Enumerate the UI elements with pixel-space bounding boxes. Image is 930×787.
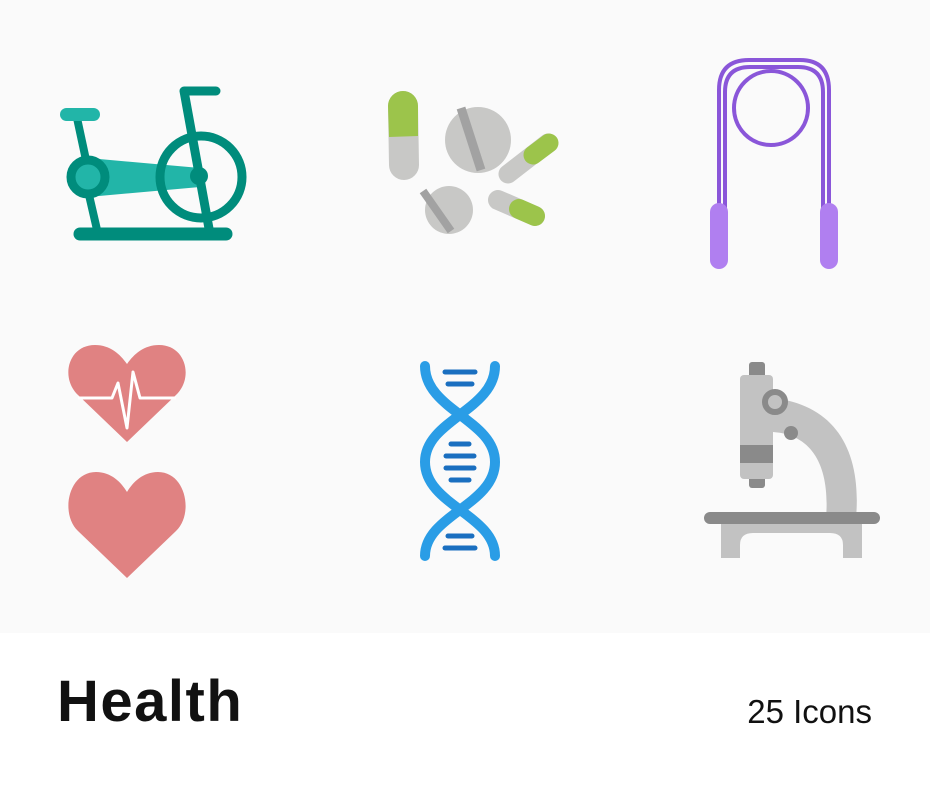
icon: heart with pulse <box>68 345 186 442</box>
icon: pills <box>388 91 549 234</box>
icon: heart <box>68 472 186 578</box>
icon count: 25 Icons <box>747 693 872 730</box>
icon: jump rope <box>719 60 829 260</box>
title: Health <box>57 669 243 734</box>
icon: DNA <box>425 366 495 556</box>
icon: microscope <box>710 362 874 558</box>
icon: exercise bike <box>60 91 242 234</box>
